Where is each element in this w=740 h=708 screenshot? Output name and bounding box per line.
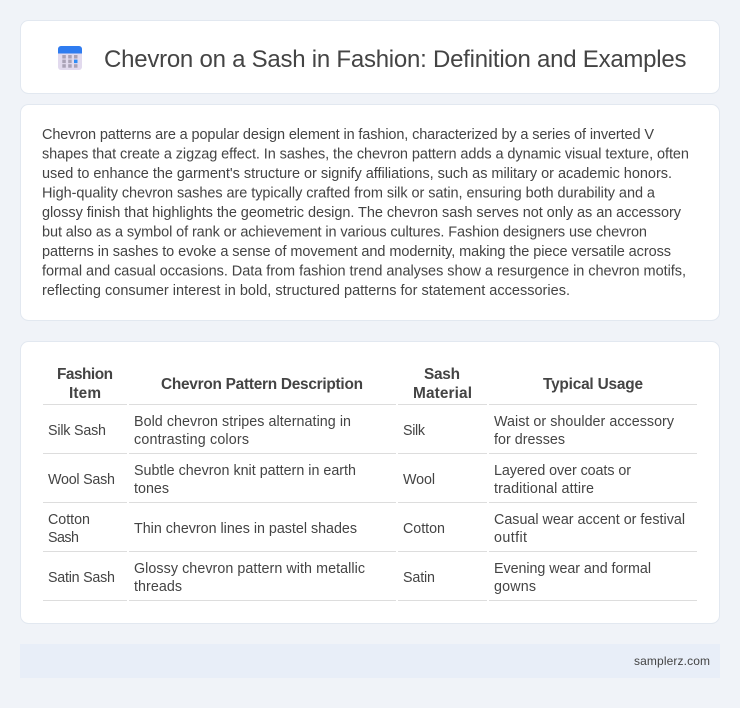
text block: description paragraph: Chevron patterns are a popular design element in fashion, characterized by a series of inverted V bbox=[42, 127, 654, 143]
table row: satin sash: Evening wear and formal bbox=[494, 561, 651, 577]
table row: silk sash: Bold chevron stripes alternating in bbox=[134, 414, 351, 430]
table header: Sash bbox=[424, 366, 460, 383]
text block: description paragraph: formal and casual occasions. Data from fashion trend analyses show a resurgence in chevron motifs, bbox=[42, 264, 686, 280]
table row: satin sash: Satin Sash bbox=[48, 570, 115, 586]
table header: Typical Usage bbox=[543, 376, 643, 393]
table header: Fashion bbox=[57, 366, 113, 383]
panel: description bbox=[20, 104, 720, 320]
panel: table card bbox=[20, 342, 720, 624]
table row: satin sash bbox=[48, 561, 651, 595]
table row: wool sash: Layered over coats or bbox=[494, 463, 631, 479]
table row: satin sash: Satin bbox=[403, 570, 435, 586]
table row: cotton sash: outfit bbox=[494, 530, 527, 546]
title: Chevron on a Sash in Fashion: Definition and Examples bbox=[104, 46, 686, 73]
text block: description paragraph: shapes that create a zigzag effect. In sashes, the chevron pattern adds a dynamic visual texture, often bbox=[42, 146, 689, 162]
table row: wool sash: Wool Sash bbox=[48, 472, 115, 488]
footer credit: samplerz.com bbox=[634, 654, 710, 668]
table row: silk sash: Silk bbox=[403, 423, 426, 439]
text block: description paragraph: patterns in sashes to evoke a sense of movement and modernity, making the piece versatile across bbox=[42, 244, 671, 260]
table row: cotton sash: Thin chevron lines in pastel shades bbox=[134, 521, 357, 537]
table row: cotton sash: Cotton bbox=[403, 521, 445, 537]
text block: description paragraph: High-quality chevron sashes are typically crafted from silk or satin, ensuring both durability and a bbox=[42, 186, 656, 202]
table row: wool sash: traditional attire bbox=[494, 481, 594, 497]
table row: silk sash: Waist or shoulder accessory bbox=[494, 414, 675, 430]
panel: title header bbox=[20, 20, 720, 94]
table row: satin sash: gowns bbox=[494, 579, 536, 595]
table row: satin sash: threads bbox=[134, 579, 182, 595]
table row: wool sash: tones bbox=[134, 481, 169, 497]
footer bbox=[20, 644, 720, 678]
table header: Material bbox=[413, 385, 472, 402]
text block: description paragraph: reflecting consumer interest in bold, structured patterns for statement accessories. bbox=[42, 283, 570, 299]
table row: cotton sash: Casual wear accent or festival bbox=[494, 512, 685, 528]
table row: wool sash bbox=[48, 463, 631, 497]
table header: Chevron Pattern Description bbox=[161, 376, 363, 393]
table row: cotton sash bbox=[48, 512, 685, 546]
text block: description paragraph: glossy finish that highlights the geometric design. The chevron sash serves not only as an accessory bbox=[42, 205, 682, 221]
table header bbox=[57, 366, 643, 402]
table row: silk sash: contrasting colors bbox=[134, 432, 249, 448]
table rules bbox=[43, 404, 697, 601]
table row: wool sash: Subtle chevron knit pattern in earth bbox=[134, 463, 356, 479]
table header: Item bbox=[69, 385, 101, 402]
table row: wool sash: Wool bbox=[403, 472, 435, 488]
table row: cotton sash: Cotton bbox=[48, 512, 90, 528]
text block: description paragraph bbox=[42, 127, 689, 299]
text block: description paragraph: used to enhance the garment's structure or signify affiliations, such as military or academic honors. bbox=[42, 166, 672, 182]
table row: silk sash: for dresses bbox=[494, 432, 565, 448]
text block: description paragraph: but also as a symbol of rank or achievement in various cultures. Fashion designers use chevron bbox=[42, 224, 647, 240]
table row: cotton sash: Sash bbox=[48, 530, 79, 546]
table row: satin sash: Glossy chevron pattern with metallic bbox=[134, 561, 365, 577]
table row: silk sash bbox=[48, 414, 675, 448]
table row: silk sash: Silk Sash bbox=[48, 423, 106, 439]
icon: calendar bbox=[58, 46, 82, 70]
